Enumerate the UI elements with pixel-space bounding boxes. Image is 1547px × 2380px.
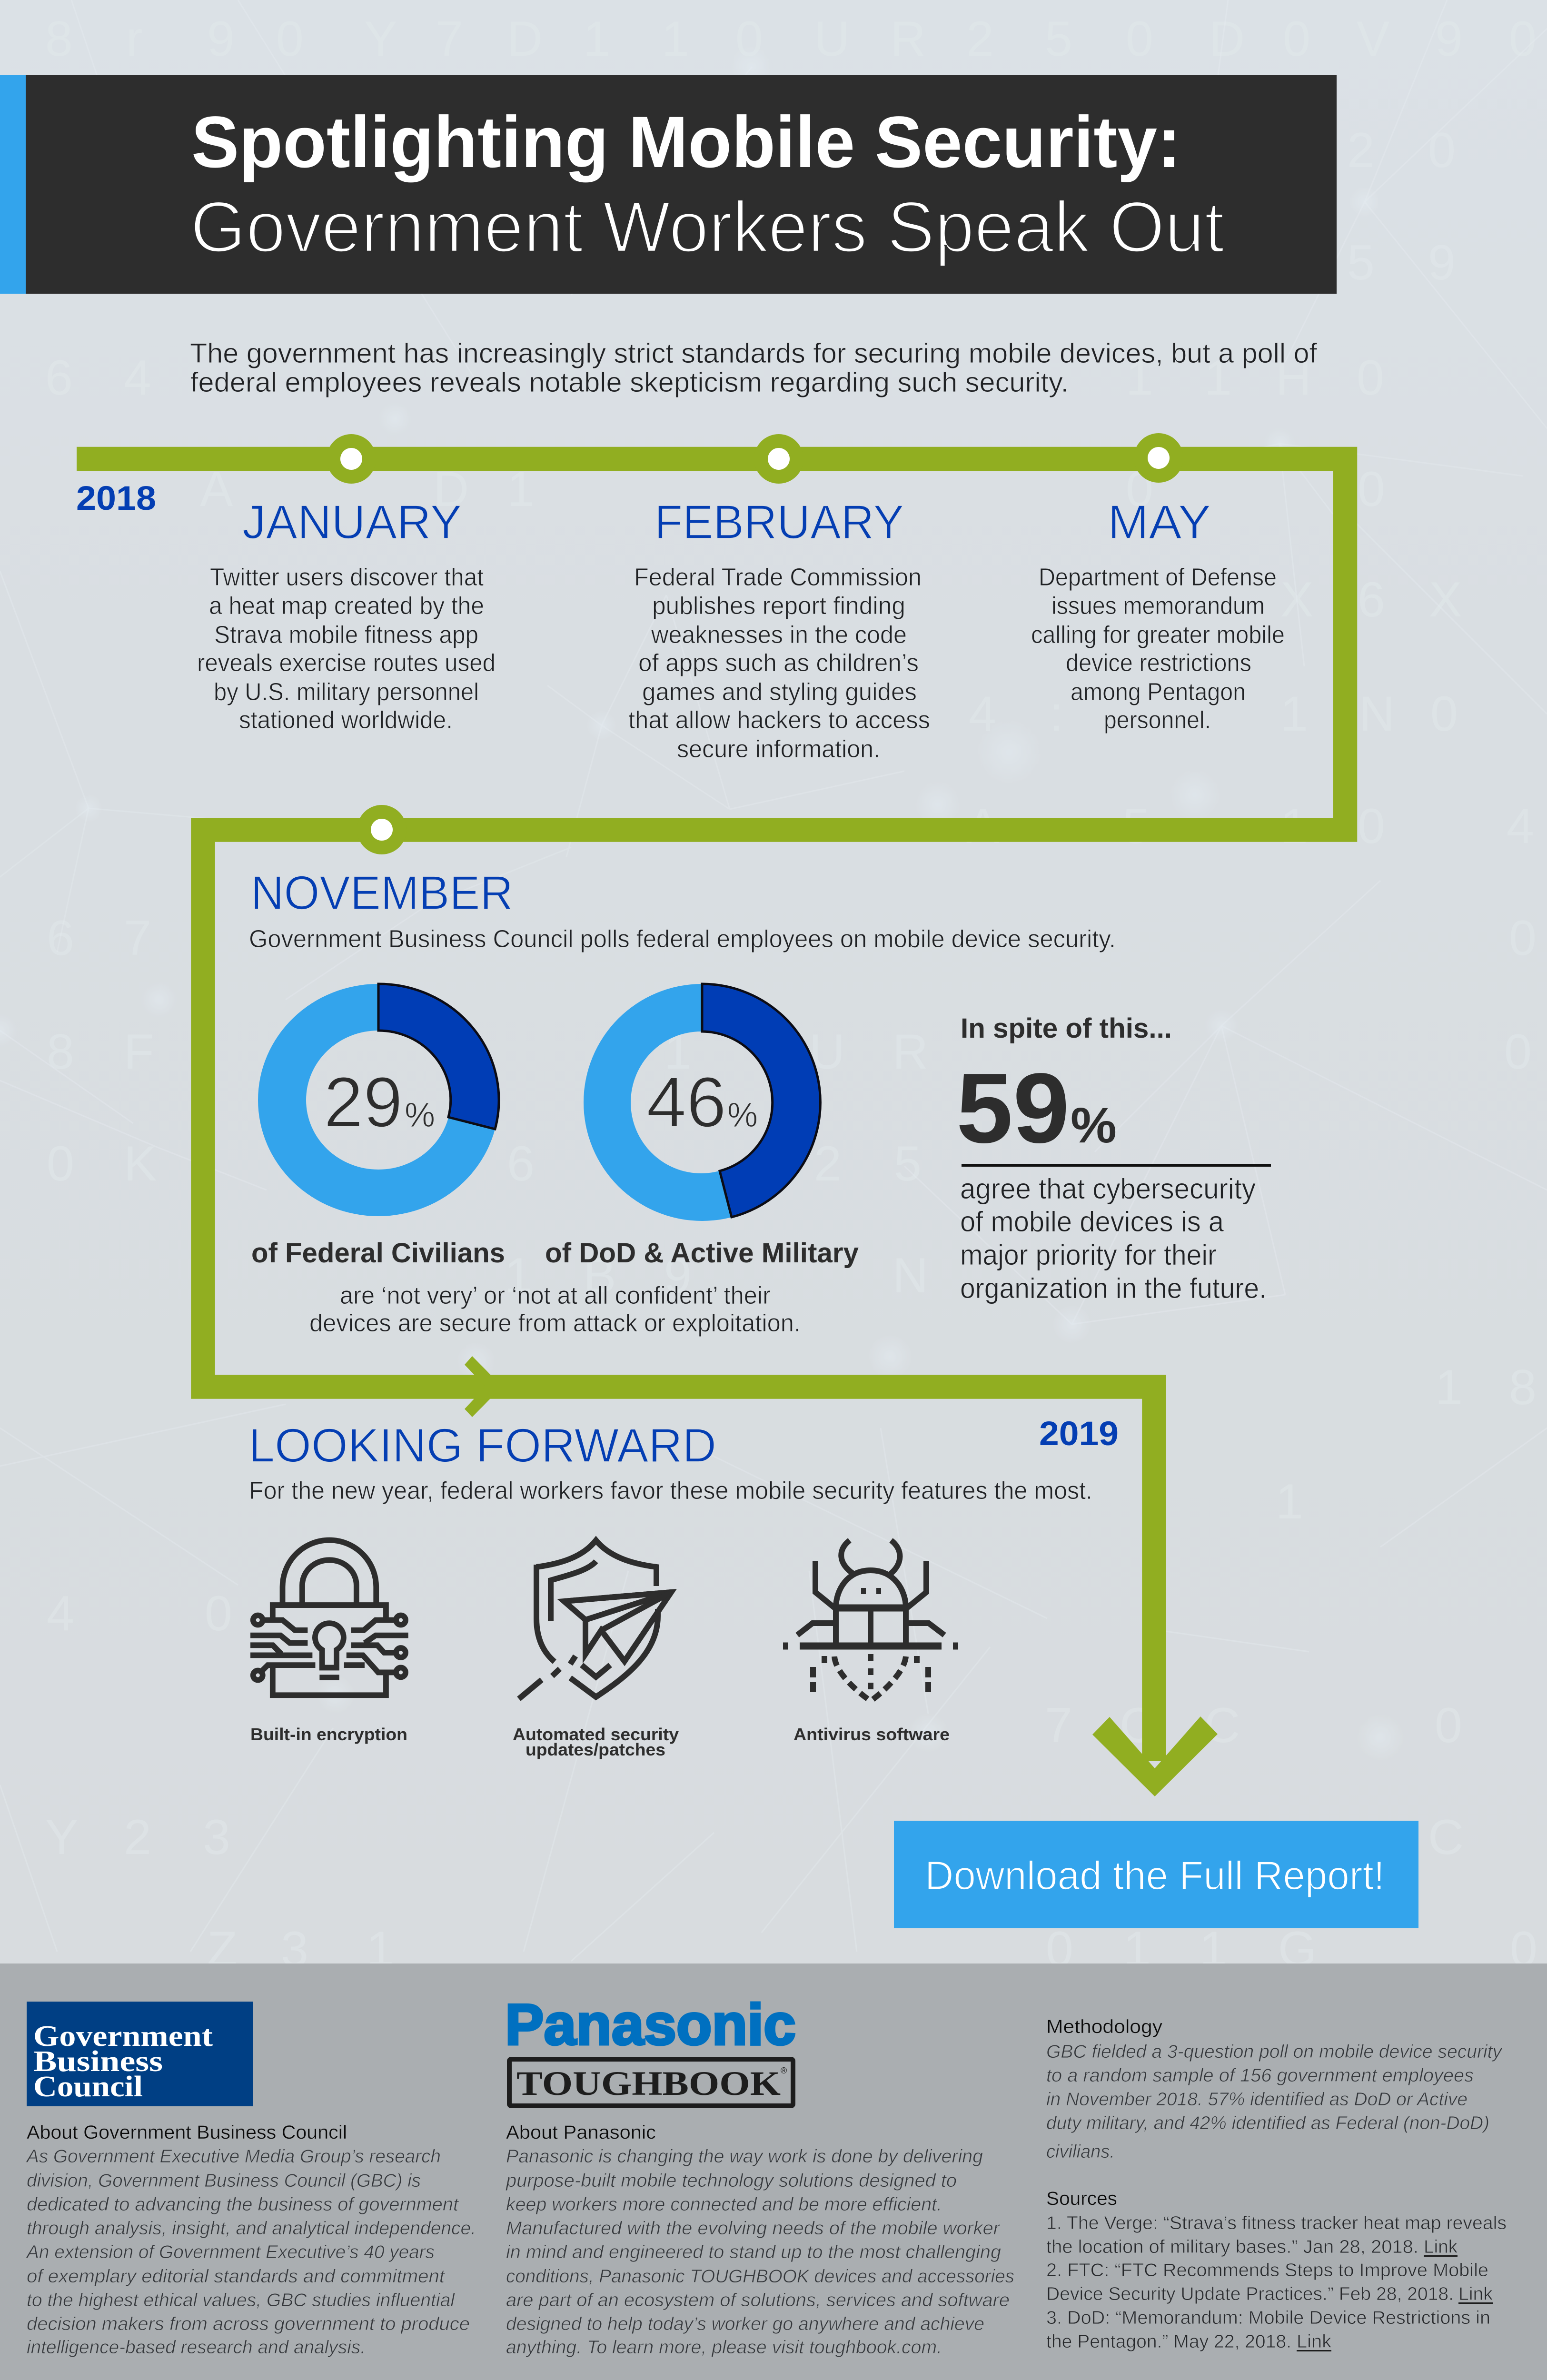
background texture: U bbox=[809, 1024, 845, 1080]
description: personnel. bbox=[1104, 706, 1211, 734]
background texture: 5 bbox=[1347, 235, 1375, 290]
background texture: 1 bbox=[507, 462, 535, 517]
callout: 59%: of mobile devices is a bbox=[960, 1206, 1224, 1238]
about Panasonic: Panasonic is changing the way work is done by delivering bbox=[506, 2146, 983, 2167]
about Panasonic: anything. To learn more, please visit toughbook.com. bbox=[506, 2337, 942, 2358]
description: calling for greater mobile bbox=[1031, 621, 1285, 649]
panel: Looking forward bbox=[248, 1419, 1092, 1759]
background texture: A bbox=[966, 799, 1000, 854]
background texture: 8 bbox=[47, 1024, 74, 1080]
background texture: 0 bbox=[1126, 462, 1153, 517]
panel: January bbox=[197, 496, 496, 734]
about GBC: decision makers from across government to produce bbox=[27, 2314, 470, 2334]
about GBC: intelligence-based research and analysis. bbox=[27, 2337, 366, 2358]
about Panasonic: About Panasonic bbox=[506, 2122, 656, 2143]
title line 2: Government Workers Speak Out bbox=[190, 187, 1224, 268]
background texture: 9 bbox=[1435, 11, 1463, 67]
background texture: A bbox=[200, 462, 233, 517]
background texture: r bbox=[126, 11, 143, 67]
about GBC: of exemplary editorial standards and commitment bbox=[27, 2266, 446, 2287]
background texture: 0 bbox=[1283, 11, 1310, 67]
description: Federal Trade Commission bbox=[634, 564, 922, 591]
footer background panel bbox=[0, 1964, 1547, 2380]
background texture: 0 bbox=[735, 11, 763, 67]
donut chart: federal civilians 29%: % bbox=[405, 1096, 435, 1134]
donut caption: are ‘not very’ or ‘not at all confident’ their bbox=[340, 1282, 771, 1309]
background texture: 1 bbox=[1435, 1360, 1463, 1415]
background texture: 2 bbox=[1347, 123, 1375, 178]
background texture: H bbox=[1276, 350, 1311, 406]
heading: JANUARY bbox=[242, 496, 462, 549]
sources: the Pentagon.” May 22, 2018. bbox=[1046, 2331, 1291, 2352]
background texture: 1 bbox=[1204, 350, 1232, 406]
background texture: R bbox=[890, 11, 926, 67]
description: among Pentagon bbox=[1071, 678, 1246, 706]
description: weaknesses in the code bbox=[651, 621, 907, 649]
background texture: 0 bbox=[1510, 1922, 1537, 1977]
background texture: V bbox=[1357, 11, 1389, 67]
about Panasonic: purpose-built mobile technology solutions designed to bbox=[506, 2171, 957, 2191]
background texture: 5 bbox=[894, 1136, 922, 1191]
panel: February bbox=[628, 496, 930, 763]
background texture: : bbox=[1050, 686, 1063, 742]
about Panasonic: Manufactured with the evolving needs of the mobile worker bbox=[506, 2218, 1001, 2239]
callout: 59%: agree that cybersecurity bbox=[960, 1173, 1256, 1205]
description: that allow hackers to access bbox=[628, 706, 930, 734]
methodology: GBC fielded a 3-question poll on mobile device security bbox=[1046, 2042, 1503, 2062]
background texture: 4 bbox=[47, 1586, 74, 1641]
methodology bbox=[1046, 2016, 1503, 2162]
icon label: updates: updates/patches bbox=[526, 1740, 665, 1759]
background texture: 1 bbox=[1126, 350, 1153, 406]
callout: 59% bbox=[956, 1013, 1271, 1304]
background texture: 1 bbox=[1123, 1922, 1151, 1977]
callout: 59%: major priority for their bbox=[960, 1239, 1217, 1271]
background texture: F bbox=[124, 1024, 154, 1080]
logo: Government Business Council bbox=[27, 2002, 253, 2106]
download button bbox=[894, 1821, 1418, 1928]
background texture: D bbox=[507, 11, 543, 67]
about GBC: to the highest ethical values, GBC studies influential bbox=[27, 2290, 455, 2311]
donut label: DoD: of DoD & Active Military bbox=[545, 1238, 859, 1269]
icon: shield with paper plane bbox=[519, 1540, 671, 1699]
year label 2019: 2019 bbox=[1039, 1415, 1119, 1453]
download button: Download the Full Report! bbox=[925, 1853, 1385, 1898]
background texture: Y bbox=[45, 1810, 78, 1865]
description: secure information. bbox=[677, 735, 880, 763]
about GBC: About Government Business Council bbox=[27, 2122, 347, 2143]
callout: 59%: organization in the future. bbox=[960, 1272, 1267, 1304]
background texture: 8 bbox=[45, 11, 73, 67]
background texture: 0 bbox=[205, 1586, 232, 1641]
methodology: duty military, and 42% identified as Federal (non-DoD) bbox=[1046, 2113, 1489, 2133]
sources: the location of military bases.” Jan 28, 2018. bbox=[1046, 2237, 1418, 2257]
about GBC: An extension of Government Executive’s 40 years bbox=[26, 2242, 435, 2262]
background texture: D bbox=[1209, 11, 1245, 67]
background texture: G bbox=[1278, 1922, 1317, 1977]
description: issues memorandum bbox=[1051, 592, 1265, 620]
background texture: 1 bbox=[367, 1922, 394, 1977]
background texture: 2 bbox=[814, 1136, 842, 1191]
background texture: 0 bbox=[1435, 1698, 1462, 1753]
sources: Sources bbox=[1046, 2188, 1117, 2209]
panel: May bbox=[1031, 496, 1285, 734]
background texture: N bbox=[1359, 686, 1395, 742]
background texture: C bbox=[1204, 1698, 1240, 1753]
timeline node: January bbox=[327, 434, 376, 484]
background texture: 1 bbox=[662, 11, 689, 67]
title line 1: Spotlighting Mobile Security: bbox=[191, 101, 1181, 183]
background texture: 0 bbox=[1357, 350, 1384, 406]
heading: FEBRUARY bbox=[654, 496, 904, 549]
donut caption bbox=[309, 1282, 801, 1337]
callout: 59%: % bbox=[1071, 1098, 1117, 1153]
background texture: 6 bbox=[1358, 572, 1385, 627]
icon label: updates: Automated security bbox=[513, 1725, 679, 1744]
subheading: For the new year, federal workers favor these mobile security features the most. bbox=[249, 1477, 1092, 1505]
background texture: 9 bbox=[664, 1248, 692, 1303]
about GBC bbox=[26, 2122, 476, 2358]
callout: 59%: In spite of this... bbox=[961, 1013, 1172, 1044]
background texture: 1 bbox=[1276, 1474, 1303, 1529]
background texture: 0 bbox=[1509, 11, 1537, 67]
heading: MAY bbox=[1108, 496, 1211, 549]
background texture: 7 bbox=[1045, 1698, 1072, 1753]
about Panasonic: in mind and engineered to stand up to the most challenging bbox=[506, 2242, 1001, 2262]
background texture: D bbox=[433, 462, 469, 517]
background texture: B bbox=[583, 1248, 616, 1303]
description: by U.S. military personnel bbox=[214, 678, 479, 706]
background texture: 1 bbox=[1280, 799, 1308, 854]
donut chart: federal civilians 29%: 29 bbox=[324, 1062, 403, 1142]
donut label: federal civilians: of Federal Civilians bbox=[251, 1238, 505, 1269]
icon label: encryption: Built-in encryption bbox=[250, 1725, 407, 1744]
background texture: 5 bbox=[1045, 11, 1072, 67]
icon label: antivirus: Antivirus software bbox=[793, 1725, 950, 1744]
logo: Toughbook bbox=[509, 2059, 793, 2106]
banner background bbox=[26, 75, 1337, 294]
background texture: 0 bbox=[1126, 11, 1153, 67]
methodology: Methodology bbox=[1046, 2016, 1162, 2037]
background texture: 0 bbox=[47, 1136, 74, 1191]
background texture: 7 bbox=[124, 911, 151, 966]
background texture: 9 bbox=[1428, 235, 1456, 290]
description bbox=[197, 564, 496, 734]
icon: padlock circuit bbox=[250, 1540, 408, 1695]
about GBC: As Government Executive Media Group’s research bbox=[26, 2146, 441, 2167]
donut chart: DoD and active military 46%: 46 bbox=[646, 1062, 726, 1142]
intro text: The government has increasingly strict standards for securing mobile devices, but a poll of bbox=[190, 338, 1318, 369]
sources bbox=[1046, 2188, 1507, 2352]
icon: bug bbox=[783, 1540, 958, 1699]
description: device restrictions bbox=[1066, 649, 1251, 677]
sources: 2. FTC: “FTC Recommends Steps to Improve Mobile bbox=[1046, 2260, 1488, 2281]
sources: Link bbox=[1297, 2331, 1332, 2352]
background texture: 4 bbox=[124, 350, 151, 406]
sources: 3. DoD: “Memorandum: Mobile Device Restrictions in bbox=[1046, 2308, 1490, 2328]
background texture: 4 bbox=[1507, 799, 1534, 854]
background texture: 0 bbox=[1504, 1024, 1532, 1080]
sources: Device Security Update Practices.” Feb 28, 2018. bbox=[1046, 2284, 1454, 2304]
background texture: 0 bbox=[1046, 1922, 1073, 1977]
callout: 59%: 59 bbox=[956, 1053, 1070, 1164]
background texture: Z bbox=[207, 1922, 238, 1977]
arrow head bbox=[1092, 1716, 1218, 1796]
description bbox=[628, 564, 930, 763]
background texture: 0 bbox=[276, 11, 304, 67]
about Panasonic: keep workers more connected and be more efficient. bbox=[506, 2194, 942, 2215]
background texture: R bbox=[892, 1024, 928, 1080]
description bbox=[1031, 564, 1285, 734]
background texture: 2 bbox=[124, 1810, 151, 1865]
heading: NOVEMBER bbox=[251, 866, 513, 920]
background texture: 1 bbox=[505, 1248, 532, 1303]
background texture: C bbox=[1120, 1698, 1155, 1753]
logo: Government Business Council: Council bbox=[33, 2071, 143, 2103]
background texture: 6 bbox=[45, 350, 73, 406]
background texture: 1 bbox=[1200, 1922, 1227, 1977]
timeline path with arrow bbox=[77, 433, 1345, 1796]
intro text bbox=[190, 338, 1318, 398]
donut chart: DoD and active military 46% bbox=[584, 984, 821, 1221]
description: Department of Defense bbox=[1039, 564, 1277, 591]
background texture: 7 bbox=[436, 11, 463, 67]
background texture: 6 bbox=[47, 911, 74, 966]
donut caption: devices are secure from attack or exploitation. bbox=[309, 1309, 801, 1337]
description: reveals exercise routes used bbox=[197, 649, 496, 677]
background texture: N bbox=[892, 1248, 928, 1303]
logo: Panasonic: Panasonic bbox=[505, 1992, 796, 2057]
description: stationed worldwide. bbox=[239, 706, 453, 734]
background texture: 5 bbox=[1122, 799, 1150, 854]
logo: Government Business Council: Government bbox=[33, 2020, 213, 2053]
background texture: 0 bbox=[1428, 123, 1456, 178]
about Panasonic bbox=[506, 2122, 1014, 2358]
logo: Toughbook: ® bbox=[781, 2066, 787, 2075]
background texture: 4 bbox=[969, 686, 996, 742]
background texture: X bbox=[1429, 572, 1462, 627]
logo: Toughbook: TOUGHBOOK bbox=[516, 2064, 781, 2102]
about Panasonic: conditions, Panasonic TOUGHBOOK devices and accessories bbox=[506, 2266, 1014, 2287]
icon label: updates bbox=[513, 1725, 679, 1759]
about GBC: division, Government Business Council (GBC) is bbox=[27, 2171, 421, 2191]
background texture: Y bbox=[364, 11, 397, 67]
description: Strava mobile fitness app bbox=[214, 621, 478, 649]
about Panasonic: are part of an ecosystem of solutions, services and software bbox=[506, 2290, 1010, 2311]
background texture: 2 bbox=[966, 11, 994, 67]
accent bar bbox=[0, 75, 26, 294]
about GBC: dedicated to advancing the business of government bbox=[27, 2194, 459, 2215]
heading: LOOKING FORWARD bbox=[248, 1419, 716, 1472]
background texture: 6 bbox=[507, 1136, 535, 1191]
methodology: to a random sample of 156 government employees bbox=[1046, 2065, 1474, 2086]
methodology: civilians. bbox=[1046, 2142, 1115, 2162]
timeline node: November bbox=[357, 805, 407, 854]
sources: Link bbox=[1424, 2237, 1458, 2257]
donut chart: DoD and active military 46%: % bbox=[727, 1096, 758, 1134]
background texture: 0 bbox=[1358, 462, 1385, 517]
timeline node: May bbox=[1134, 433, 1183, 483]
about GBC: through analysis, insight, and analytical independence. bbox=[27, 2218, 476, 2239]
background texture: 0 bbox=[1358, 799, 1385, 854]
background texture: X bbox=[1280, 572, 1313, 627]
title banner bbox=[0, 75, 1337, 294]
donut chart: federal civilians 29% bbox=[258, 984, 499, 1216]
year label 2018: 2018 bbox=[76, 480, 156, 517]
methodology: in November 2018. 57% identified as DoD or Active bbox=[1046, 2089, 1468, 2110]
background texture: K bbox=[124, 1136, 157, 1191]
background texture: 1 bbox=[664, 1024, 692, 1080]
description: Twitter users discover that bbox=[210, 564, 484, 591]
about Panasonic: designed to help today’s worker go anywhere and achieve bbox=[506, 2314, 984, 2334]
background texture: 9 bbox=[207, 11, 235, 67]
mid-path chevron bbox=[465, 1356, 502, 1417]
sources: 1. The Verge: “Strava’s fitness tracker heat map reveals bbox=[1046, 2213, 1507, 2233]
description: a heat map created by the bbox=[209, 592, 484, 620]
logo: Government Business Council: Business bbox=[33, 2045, 163, 2078]
background texture: 0 bbox=[1430, 686, 1458, 742]
sources: Link bbox=[1458, 2284, 1493, 2304]
background texture: 0 bbox=[1509, 911, 1537, 966]
background texture: 3 bbox=[281, 1922, 308, 1977]
description: games and styling guides bbox=[642, 678, 917, 706]
timeline node: February bbox=[754, 434, 803, 484]
background texture: C bbox=[1428, 1810, 1464, 1865]
description: publishes report finding bbox=[652, 592, 905, 620]
panel: November poll bbox=[249, 866, 1271, 1337]
background texture: 8 bbox=[1509, 1360, 1537, 1415]
background texture: 1 bbox=[583, 11, 611, 67]
intro text: federal employees reveals notable skepticism regarding such security. bbox=[190, 367, 1069, 398]
background texture: U bbox=[814, 11, 850, 67]
description: of apps such as children’s bbox=[638, 649, 919, 677]
subheading: Government Business Council polls federal employees on mobile device security. bbox=[249, 925, 1116, 953]
background texture: 1 bbox=[1280, 686, 1308, 742]
background texture: 3 bbox=[203, 1810, 230, 1865]
